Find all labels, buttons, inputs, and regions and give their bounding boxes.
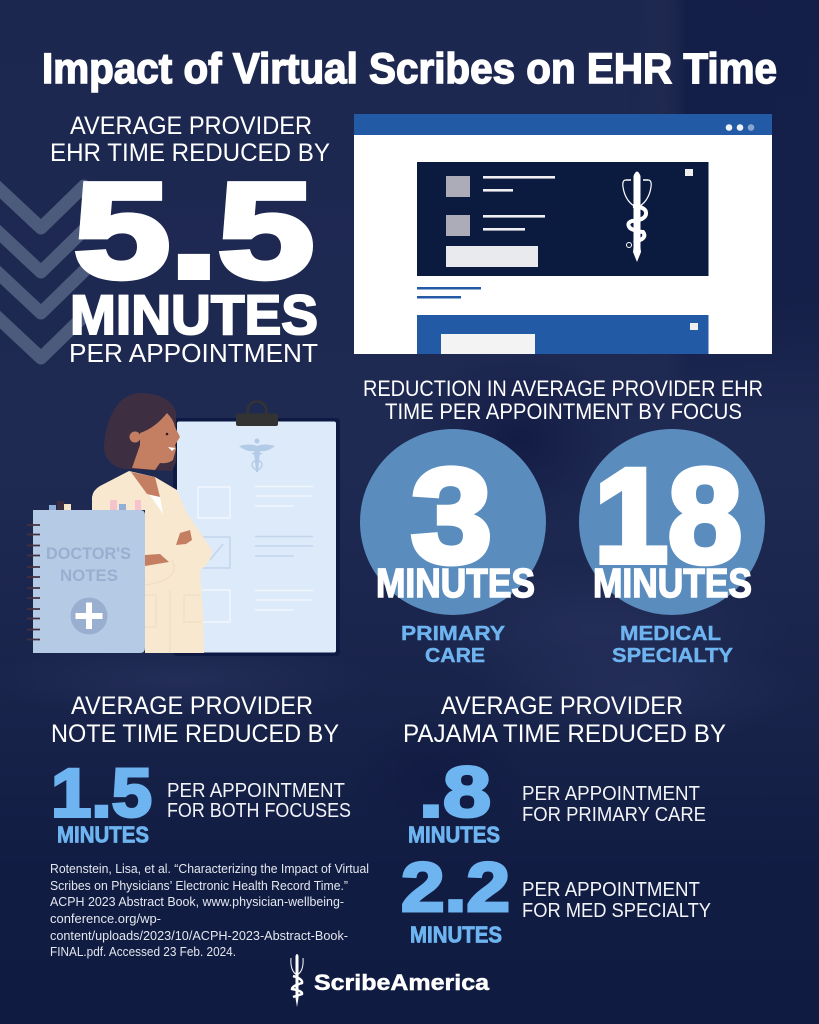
headline stat: 5.5 minutes: PER APPOINTMENT [69,338,318,368]
section: note time: FOR BOTH FOCUSES [167,800,351,822]
heading: reduction by focus [363,376,763,424]
heading: reduction by focus: TIME PER APPOINTMENT BY FOCUS [385,399,742,424]
citation [50,862,369,959]
logo: ScribeAmerica: ScribeAmerica [314,970,490,995]
section: pajama time: MINUTES [410,922,502,948]
logo: ScribeAmerica [291,954,490,1007]
heading: reduction by focus: REDUCTION IN AVERAGE PROVIDER EHR [363,376,763,401]
section: pajama time: 2.2 [401,848,510,926]
background [0,438,819,1024]
citation: content/uploads/2023/10/ACPH-2023-Abstract-Book- [50,929,348,943]
citation: ACPH 2023 Abstract Book, www.physician-wellbeing- [50,895,344,909]
section: pajama time [401,692,726,948]
section: pajama time: FOR PRIMARY CARE [522,804,706,826]
section: note time: MINUTES [57,822,149,848]
citation: FINAL.pdf. Accessed 23 Feb. 2024. [50,945,236,959]
stat circle: medical specialty: 18 [594,442,742,591]
section: pajama time: AVERAGE PROVIDER [441,692,683,720]
icon: pen with stethoscope and serpent [623,172,651,262]
section: pajama time: FOR MED SPECIALTY [522,900,711,922]
headline stat: 5.5 minutes: AVERAGE PROVIDER [70,112,312,140]
title: Impact of Virtual Scribes on EHR Time [42,45,777,93]
citation: Scribes on Physicians’ Electronic Health Record Time.” [50,879,348,893]
citation: conference.org/wp- [50,912,161,926]
section: note time: PER APPOINTMENT [167,780,345,802]
section: pajama time: PER APPOINTMENT [522,879,700,901]
stat circle: medical specialty: MINUTES [593,560,752,606]
decorative chevrons [0,184,84,358]
notebook: NOTES [60,566,118,585]
section: note time: NOTE TIME REDUCED BY [51,720,339,748]
stat circle: medical specialty: MEDICAL [620,623,721,645]
headline stat: 5.5 minutes: 5.5 [74,155,314,306]
stat circle: primary care: CARE [425,645,485,667]
stat circle: primary care: PRIMARY [401,623,506,645]
section: pajama time: MINUTES [408,822,500,848]
section: pajama time: .8 [419,754,491,832]
headline stat: 5.5 minutes [50,112,330,368]
illustration: doctor with clipboard and notes [27,393,340,656]
notebook [27,501,145,653]
stat circle: primary care: 3 [411,442,492,591]
section: pajama time: PAJAMA TIME REDUCED BY [403,720,726,748]
section: pajama time: PER APPOINTMENT [522,783,700,805]
headline stat: 5.5 minutes: EHR TIME REDUCED BY [50,139,330,167]
stat circle: medical specialty: SPECIALTY [612,645,734,667]
section: note time: AVERAGE PROVIDER [71,692,313,720]
stat circle: medical specialty [579,429,765,667]
headline stat: 5.5 minutes: MINUTES [70,283,318,346]
citation: Rotenstein, Lisa, et al. “Characterizing the Impact of Virtual [50,862,369,876]
section: note time: 1.5 [51,754,152,832]
clipboard [173,402,340,656]
notebook: DOCTOR'S [46,544,131,563]
doctor [92,393,212,653]
stat circle: primary care [360,429,546,667]
illustration: EHR browser window [354,114,772,354]
section: note time [51,692,351,848]
stat circle: primary care: MINUTES [376,560,535,606]
